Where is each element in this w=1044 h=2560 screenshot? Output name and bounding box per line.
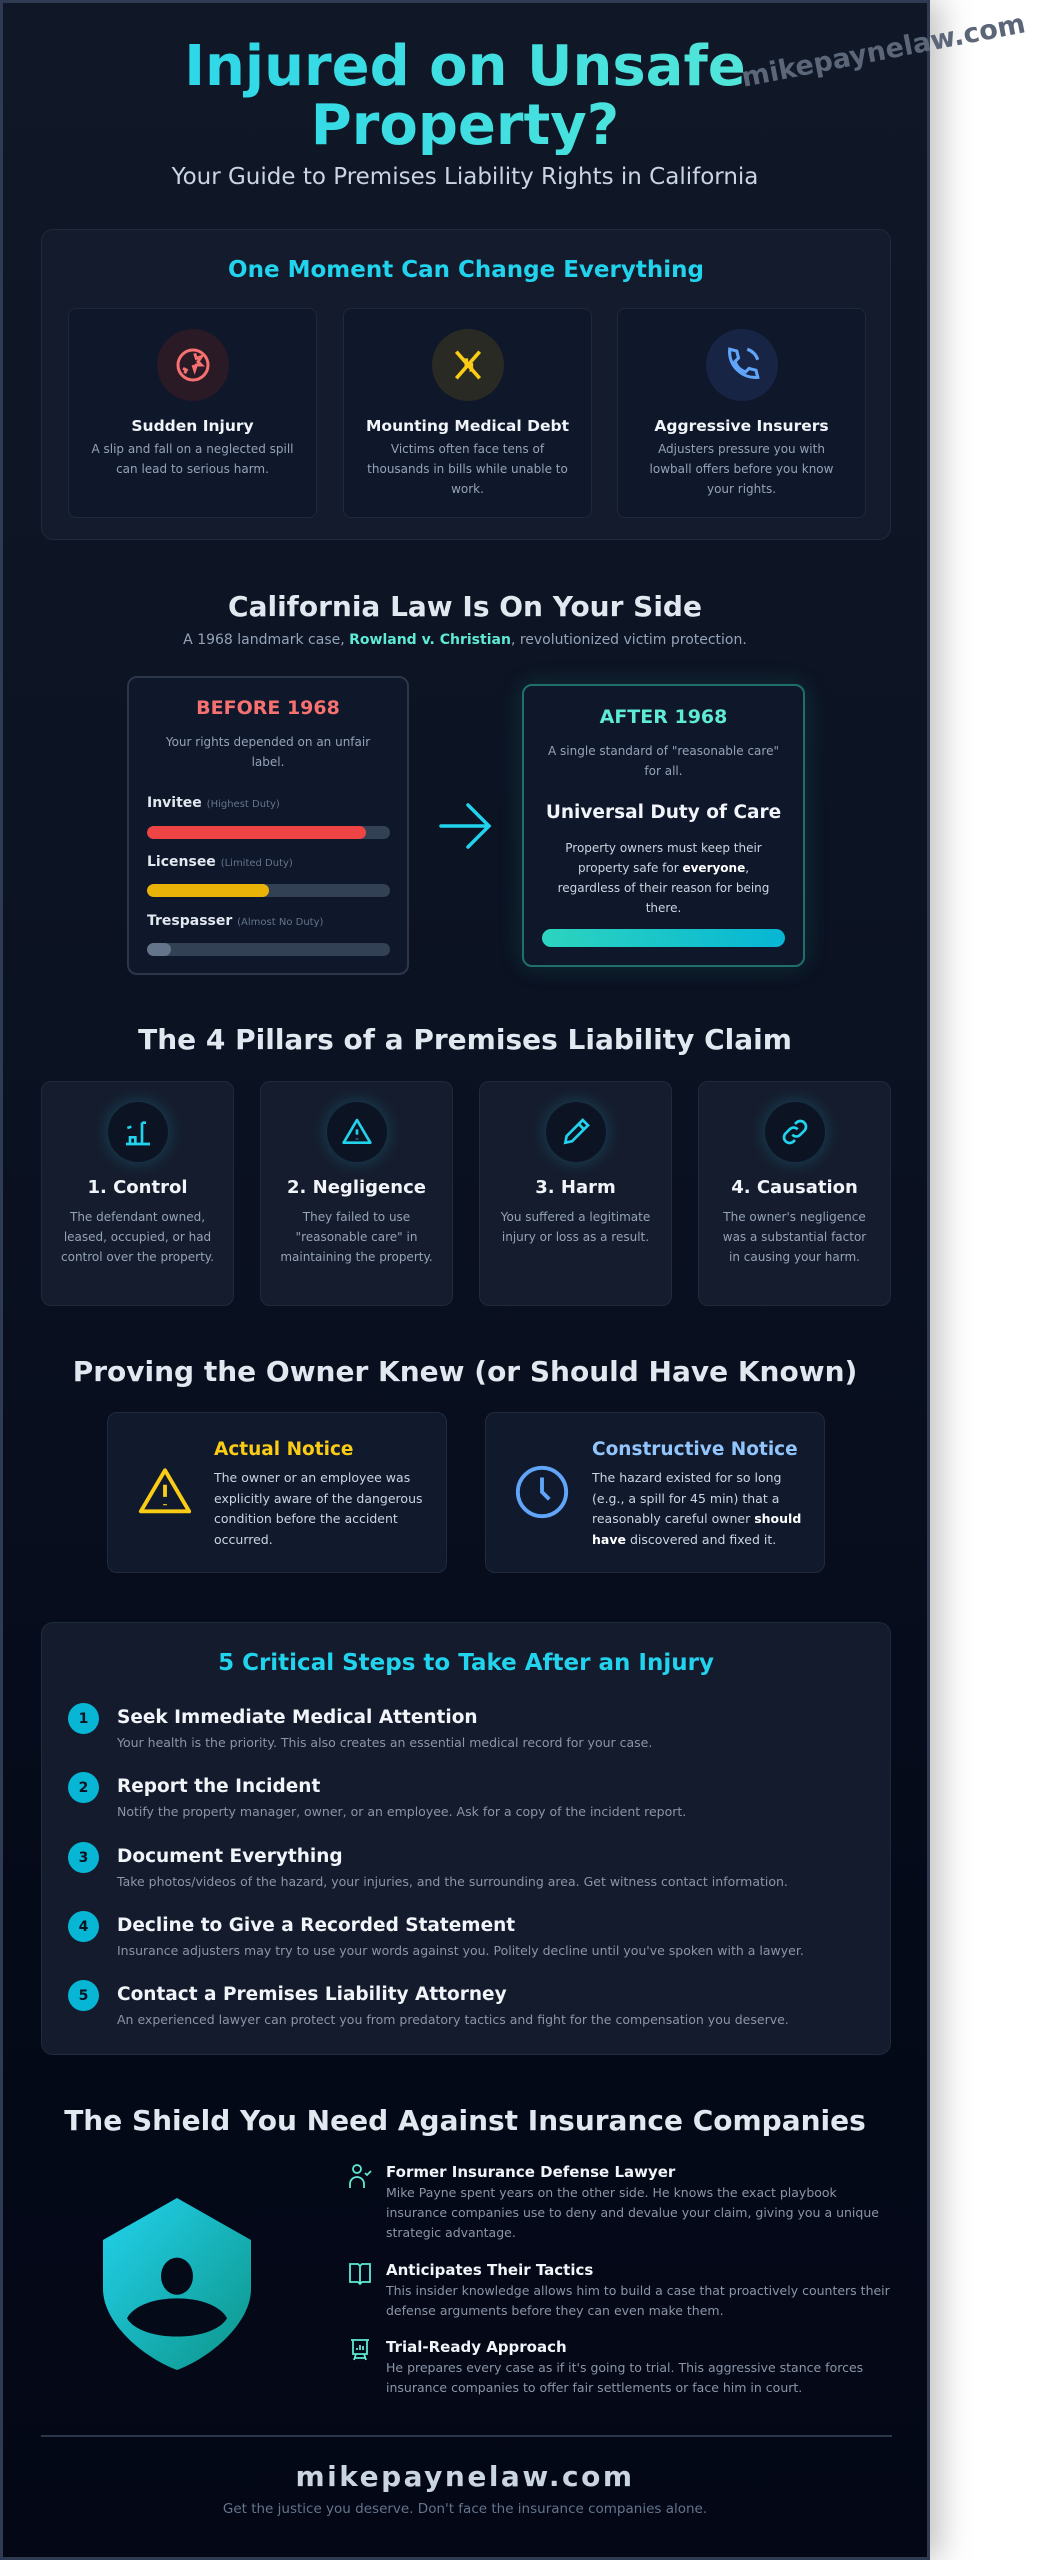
step 1: Your health is the priority. This also creates an essential medical record for your case. xyxy=(117,1735,652,1750)
card: medical debt: Mounting Medical Debt xyxy=(366,417,569,435)
step 2 xyxy=(68,1772,686,1819)
card: constructive notice xyxy=(485,1412,825,1573)
item: former defense lawyer: Former Insurance Defense Lawyer xyxy=(386,2163,675,2181)
panel: 5 steps: Contact a Premises Liability Attorney xyxy=(117,1984,507,2005)
panel: after 1968 xyxy=(522,684,805,967)
bar: invitee xyxy=(147,826,390,839)
step 1: 1 xyxy=(79,1710,88,1726)
panel: 5 steps: 5 Critical Steps to Take After an Injury xyxy=(218,1650,714,1676)
bar: licensee xyxy=(147,884,390,897)
panel: after 1968: A single standard of "reasonable care" for all. xyxy=(548,744,779,778)
bar: trespasser xyxy=(147,943,390,956)
panel: before 1968: Invitee (Highest Duty) xyxy=(147,795,280,811)
step 3 xyxy=(68,1842,788,1889)
panel: 5 steps: Decline to Give a Recorded Statement xyxy=(117,1915,515,1936)
step 4 xyxy=(68,1911,804,1958)
icon: shield xyxy=(103,2198,251,2370)
pillar: control: The defendant owned, leased, occupied, or had control over the property. xyxy=(61,1210,214,1264)
panel: before 1968: Trespasser (Almost No Duty) xyxy=(147,913,323,929)
card: medical debt: Victims often face tens of thousands in bills while unable to work. xyxy=(367,442,568,496)
gradient bar xyxy=(542,929,785,947)
item: trial ready: Trial-Ready Approach xyxy=(386,2338,567,2356)
text: Mike Payne spent years on the other side. He knows the exact playbook insurance companies use to deny and devalue your claim, giving you a unique strategic advantage. xyxy=(386,2185,879,2240)
divider xyxy=(41,2435,892,2437)
icon: medical xyxy=(432,329,504,401)
heading: One Moment Can Change Everything xyxy=(228,257,704,283)
panel: 5 steps: Report the Incident xyxy=(117,1776,320,1797)
step 5: 5 xyxy=(79,1988,88,2004)
step 3: 3 xyxy=(79,1850,88,1866)
title: Property? xyxy=(311,93,619,158)
card: sudden injury xyxy=(68,308,317,518)
pillar: causation xyxy=(698,1081,891,1306)
panel: after 1968: Universal Duty of Care xyxy=(546,802,781,823)
pillar: harm xyxy=(479,1081,672,1306)
panel: 5 steps: Document Everything xyxy=(117,1846,343,1867)
panel: before 1968 xyxy=(127,676,409,975)
panel: before 1968: BEFORE 1968 xyxy=(196,697,340,719)
pillar: causation: The owner's negligence was a substantial factor in causing your harm. xyxy=(723,1210,866,1264)
heading: shield: The Shield You Need Against Insurance Companies xyxy=(64,2104,866,2137)
text: He prepares every case as if it's going to trial. This aggressive stance forces insurance companies to offer fair settlements or face him in court. xyxy=(386,2360,863,2395)
title xyxy=(0,37,930,155)
card: actual notice xyxy=(107,1412,447,1573)
panel: before 1968: Your rights depended on an unfair label. xyxy=(166,735,370,768)
card: constructive notice: Constructive Notice xyxy=(592,1439,798,1460)
pillar: negligence: 2. Negligence xyxy=(287,1177,426,1198)
card: actual notice: Actual Notice xyxy=(214,1439,353,1460)
pillar: control xyxy=(41,1081,234,1306)
step 4: Insurance adjusters may try to use your words against you. Politely decline until you've spoken with a lawyer. xyxy=(117,1943,804,1958)
subtitle: Your Guide to Premises Liability Rights in California xyxy=(172,164,758,190)
footer brand: mikepaynelaw.com xyxy=(295,2460,635,2493)
text: This insider knowledge allows him to build a case that proactively counters their defense arguments before they can even make them. xyxy=(386,2283,890,2318)
step 3: Take photos/videos of the hazard, your injuries, and the surrounding area. Get witness contact information. xyxy=(117,1874,788,1889)
step 1 xyxy=(68,1703,652,1750)
card: constructive notice: The hazard existed for so long (e.g., a spill for 45 min) that a reasonably careful owner should have discovered and fixed it. xyxy=(592,1470,801,1546)
item: anticipates tactics xyxy=(349,2261,890,2318)
item: anticipates tactics: Anticipates Their Tactics xyxy=(386,2261,593,2279)
card: actual notice: The owner or an employee was explicitly aware of the dangerous condition before the accident occurred. xyxy=(214,1470,423,1546)
icon: injury xyxy=(157,329,229,401)
heading: california law: California Law Is On Your Side xyxy=(228,590,702,623)
pillar: negligence xyxy=(260,1081,453,1306)
card: sudden injury: A slip and fall on a neglected spill can lead to serious harm. xyxy=(91,442,294,476)
item: former defense lawyer xyxy=(349,2163,879,2240)
title: Injured on Unsafe xyxy=(184,34,746,99)
card: medical debt xyxy=(343,308,592,518)
step 5: An experienced lawyer can protect you from predatory tactics and fight for the compensation you deserve. xyxy=(117,2012,789,2027)
panel: one moment xyxy=(41,229,891,540)
pillar: negligence: They failed to use "reasonable care" in maintaining the property. xyxy=(280,1210,433,1264)
pillar: harm: You suffered a legitimate injury or loss as a result. xyxy=(501,1210,650,1244)
pillar: control: 1. Control xyxy=(87,1177,188,1198)
panel: after 1968: Property owners must keep their property safe for everyone, regardless of their reason for being there. xyxy=(558,841,769,915)
step 2: Notify the property manager, owner, or an employee. Ask for a copy of the incident report. xyxy=(117,1804,686,1819)
icon: phone xyxy=(706,329,778,401)
panel: after 1968: AFTER 1968 xyxy=(600,706,727,728)
watermark: mikepaynelaw.com xyxy=(739,8,1028,94)
panel: before 1968: Licensee (Limited Duty) xyxy=(147,854,293,870)
step 4: 4 xyxy=(79,1918,88,1934)
pillar: causation: 4. Causation xyxy=(731,1177,858,1198)
icon: clock xyxy=(516,1466,568,1518)
panel: 5 steps xyxy=(41,1622,891,2055)
subheading: A 1968 landmark case, Rowland v. Christian, revolutionized victim protection. xyxy=(183,632,747,648)
icon: warning xyxy=(138,1468,192,1514)
heading: 4 pillars: The 4 Pillars of a Premises Liability Claim xyxy=(138,1023,792,1056)
arrow xyxy=(439,803,492,849)
card: sudden injury: Sudden Injury xyxy=(131,417,254,435)
step 5 xyxy=(68,1980,789,2027)
step 2: 2 xyxy=(79,1780,88,1796)
footer tagline: Get the justice you deserve. Don't face the insurance companies alone. xyxy=(223,2501,707,2517)
pillar: harm: 3. Harm xyxy=(535,1177,616,1198)
card: insurers: Aggressive Insurers xyxy=(654,417,829,435)
heading: proving: Proving the Owner Knew (or Should Have Known) xyxy=(73,1355,857,1388)
card: insurers: Adjusters pressure you with lowball offers before you know your rights. xyxy=(650,442,833,496)
item: trial ready xyxy=(351,2338,863,2395)
card: insurers xyxy=(617,308,866,518)
panel: 5 steps: Seek Immediate Medical Attention xyxy=(117,1707,478,1728)
